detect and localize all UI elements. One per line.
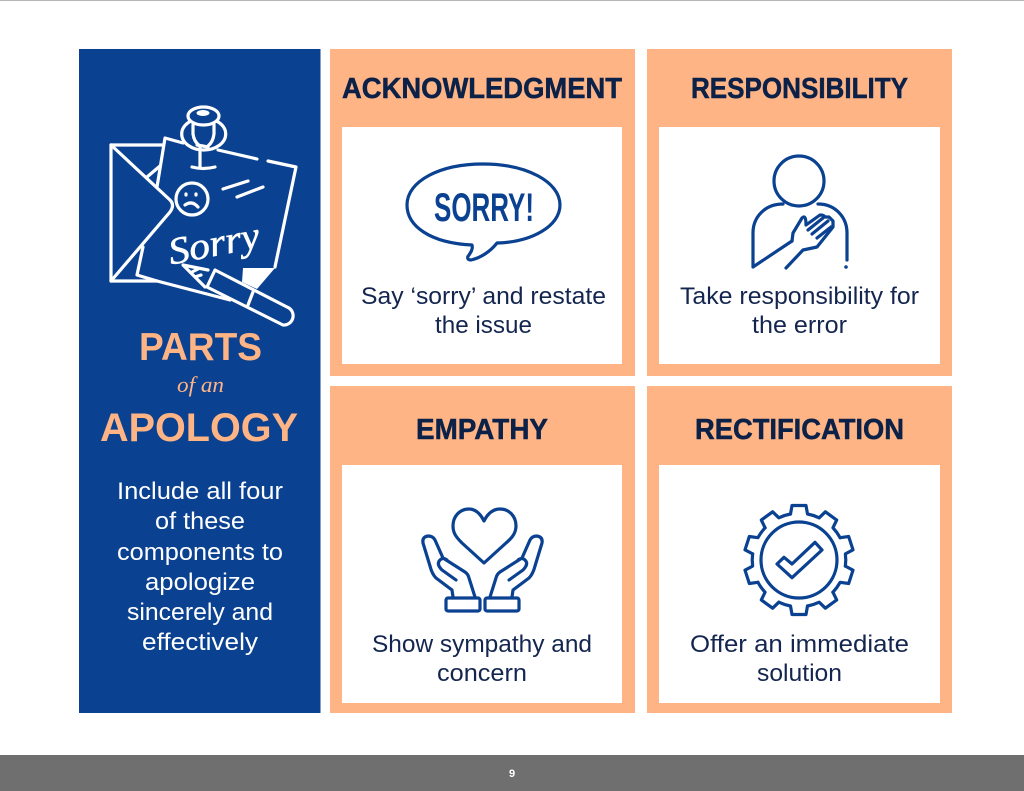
heading: acknowledgment: ACKNOWLEDGMENT [342,73,622,105]
heading: rectification: RECTIFICATION [695,414,904,446]
text: empathy description [372,631,592,687]
icon: sorry note with envelope, pin and pen: Sorry [165,215,263,273]
text block: description: effectively [142,629,258,656]
icon: sorry note with envelope, pin and pen [111,107,296,325]
panel: title sidebar [79,49,320,713]
panel: responsibility [647,49,952,376]
heading: of an: of an [177,372,224,397]
panel: rectification [647,386,952,713]
text: rectification description [690,631,909,687]
footer bar with page number: 9 [509,768,515,780]
footer bar with page number [0,755,1024,791]
text: empathy description: concern [437,660,527,687]
heading: empathy: EMPATHY [416,414,548,446]
icon: sorry speech bubble [407,164,560,260]
icon: hands holding heart [423,509,542,611]
heading: parts: PARTS [139,326,262,369]
text: empathy description: Show sympathy and [372,631,592,658]
text: acknowledgment description: the issue [435,312,532,339]
text: acknowledgment description [361,283,606,339]
icon: gear with check mark [741,504,857,616]
text: acknowledgment description: Say ‘sorry’ and restate [361,283,606,310]
text: responsibility description: the error [752,312,847,339]
text: rectification description: solution [757,660,842,687]
text: rectification description: Offer an immediate [690,631,909,658]
text block: description: sincerely and [127,599,273,626]
icon: sorry speech bubble: SORRY! [434,186,534,230]
text block: description: Include all four [117,478,283,505]
panel: acknowledgment [330,49,635,376]
heading: responsibility: RESPONSIBILITY [691,73,908,105]
text: responsibility description: Take responsibility for [680,283,919,310]
heading: apology: APOLOGY [100,406,298,450]
panel: empathy [330,386,635,713]
text block: description: apologize [145,569,255,596]
text block: description [117,478,283,656]
icon: person with hand on heart [753,156,848,269]
text block: description: components to [117,539,283,566]
text: responsibility description [680,283,919,339]
text block: description: of these [155,508,245,535]
